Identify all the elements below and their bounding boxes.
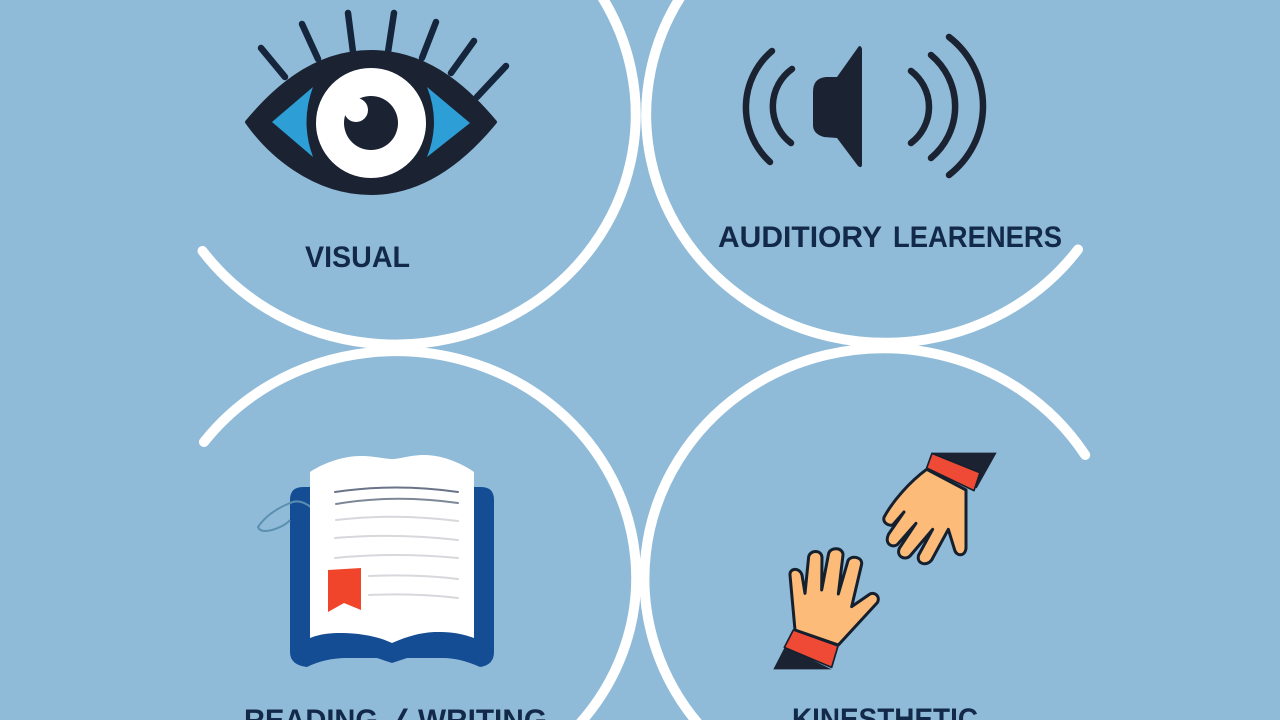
icon: eye bbox=[247, 13, 506, 193]
icon: reaching hands bbox=[773, 453, 997, 669]
label: reading / writing bbox=[244, 704, 547, 720]
lower hand bbox=[773, 549, 878, 669]
panel: auditory learners bbox=[718, 37, 1062, 254]
icon: open book bbox=[258, 455, 494, 667]
icon: speaker with sound waves bbox=[746, 37, 983, 175]
label: visual: VISUAL bbox=[305, 241, 410, 274]
panel: visual bbox=[247, 13, 506, 274]
panel: reading / writing bbox=[244, 455, 547, 720]
label: auditory learners bbox=[718, 221, 1062, 254]
label: auditory learners: AUDITIORY bbox=[718, 221, 882, 254]
bookmark bbox=[328, 568, 361, 612]
upper hand bbox=[884, 453, 997, 564]
label: auditory learners: LEARENERS bbox=[893, 221, 1062, 254]
panel: kinesthetic bbox=[773, 453, 997, 720]
